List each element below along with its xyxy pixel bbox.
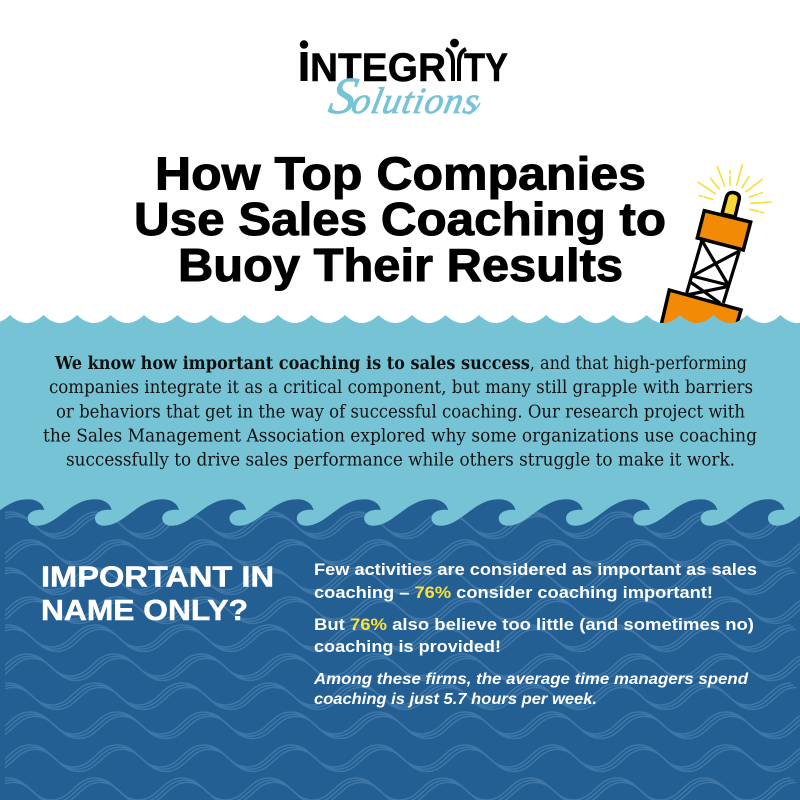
intro paragraph: the Sales Management Association explored why some organizations use coaching [43, 426, 757, 446]
text block: coaching statistics: coaching is just 5.7 hours per week. [314, 691, 597, 708]
text block: coaching statistics: Few activities are considered as important as sales [314, 560, 757, 579]
panel: light blue water with scalloped top [0, 315, 800, 540]
text block: coaching statistics [313, 560, 757, 708]
logo: Integrity Solutions: NTEGR [310, 46, 446, 90]
heading: Important in name only?: NAME ONLY? [41, 595, 248, 627]
heading: Important in name only? [41, 562, 274, 627]
logo: Integrity Solutions: Solutions [324, 68, 487, 125]
intro paragraph: companies integrate it as a critical component, but many still grapple with barriers [49, 378, 753, 398]
title: How Top Companies [155, 148, 646, 200]
logo: Integrity Solutions: TY [464, 46, 508, 90]
title: Use Sales Coaching to [134, 193, 666, 245]
icon: buoy with light rays [660, 165, 771, 330]
text block: coaching statistics: Among these firms, the average time managers spend [313, 671, 749, 688]
title: Buoy Their Results [178, 239, 623, 291]
decorative wave line pattern [0, 512, 800, 800]
text block: coaching statistics: coaching – 76% consider coaching important! [314, 583, 713, 602]
text block: coaching statistics: coaching is provided! [314, 637, 501, 656]
intro paragraph: We know how important coaching is to sales success, and that high-performing [54, 354, 747, 374]
intro paragraph [43, 354, 757, 470]
logo: Integrity Solutions [300, 39, 508, 125]
intro paragraph: or behaviors that get in the way of successful coaching. Our research project with [56, 402, 745, 422]
title [134, 148, 666, 291]
panel: dark blue waves [0, 499, 800, 800]
intro paragraph: successfully to drive sales performance while others struggle to make it work. [66, 450, 735, 470]
heading: Important in name only?: IMPORTANT IN [41, 562, 274, 594]
text block: coaching statistics: But 76% also believe too little (and sometimes no) [314, 615, 754, 634]
